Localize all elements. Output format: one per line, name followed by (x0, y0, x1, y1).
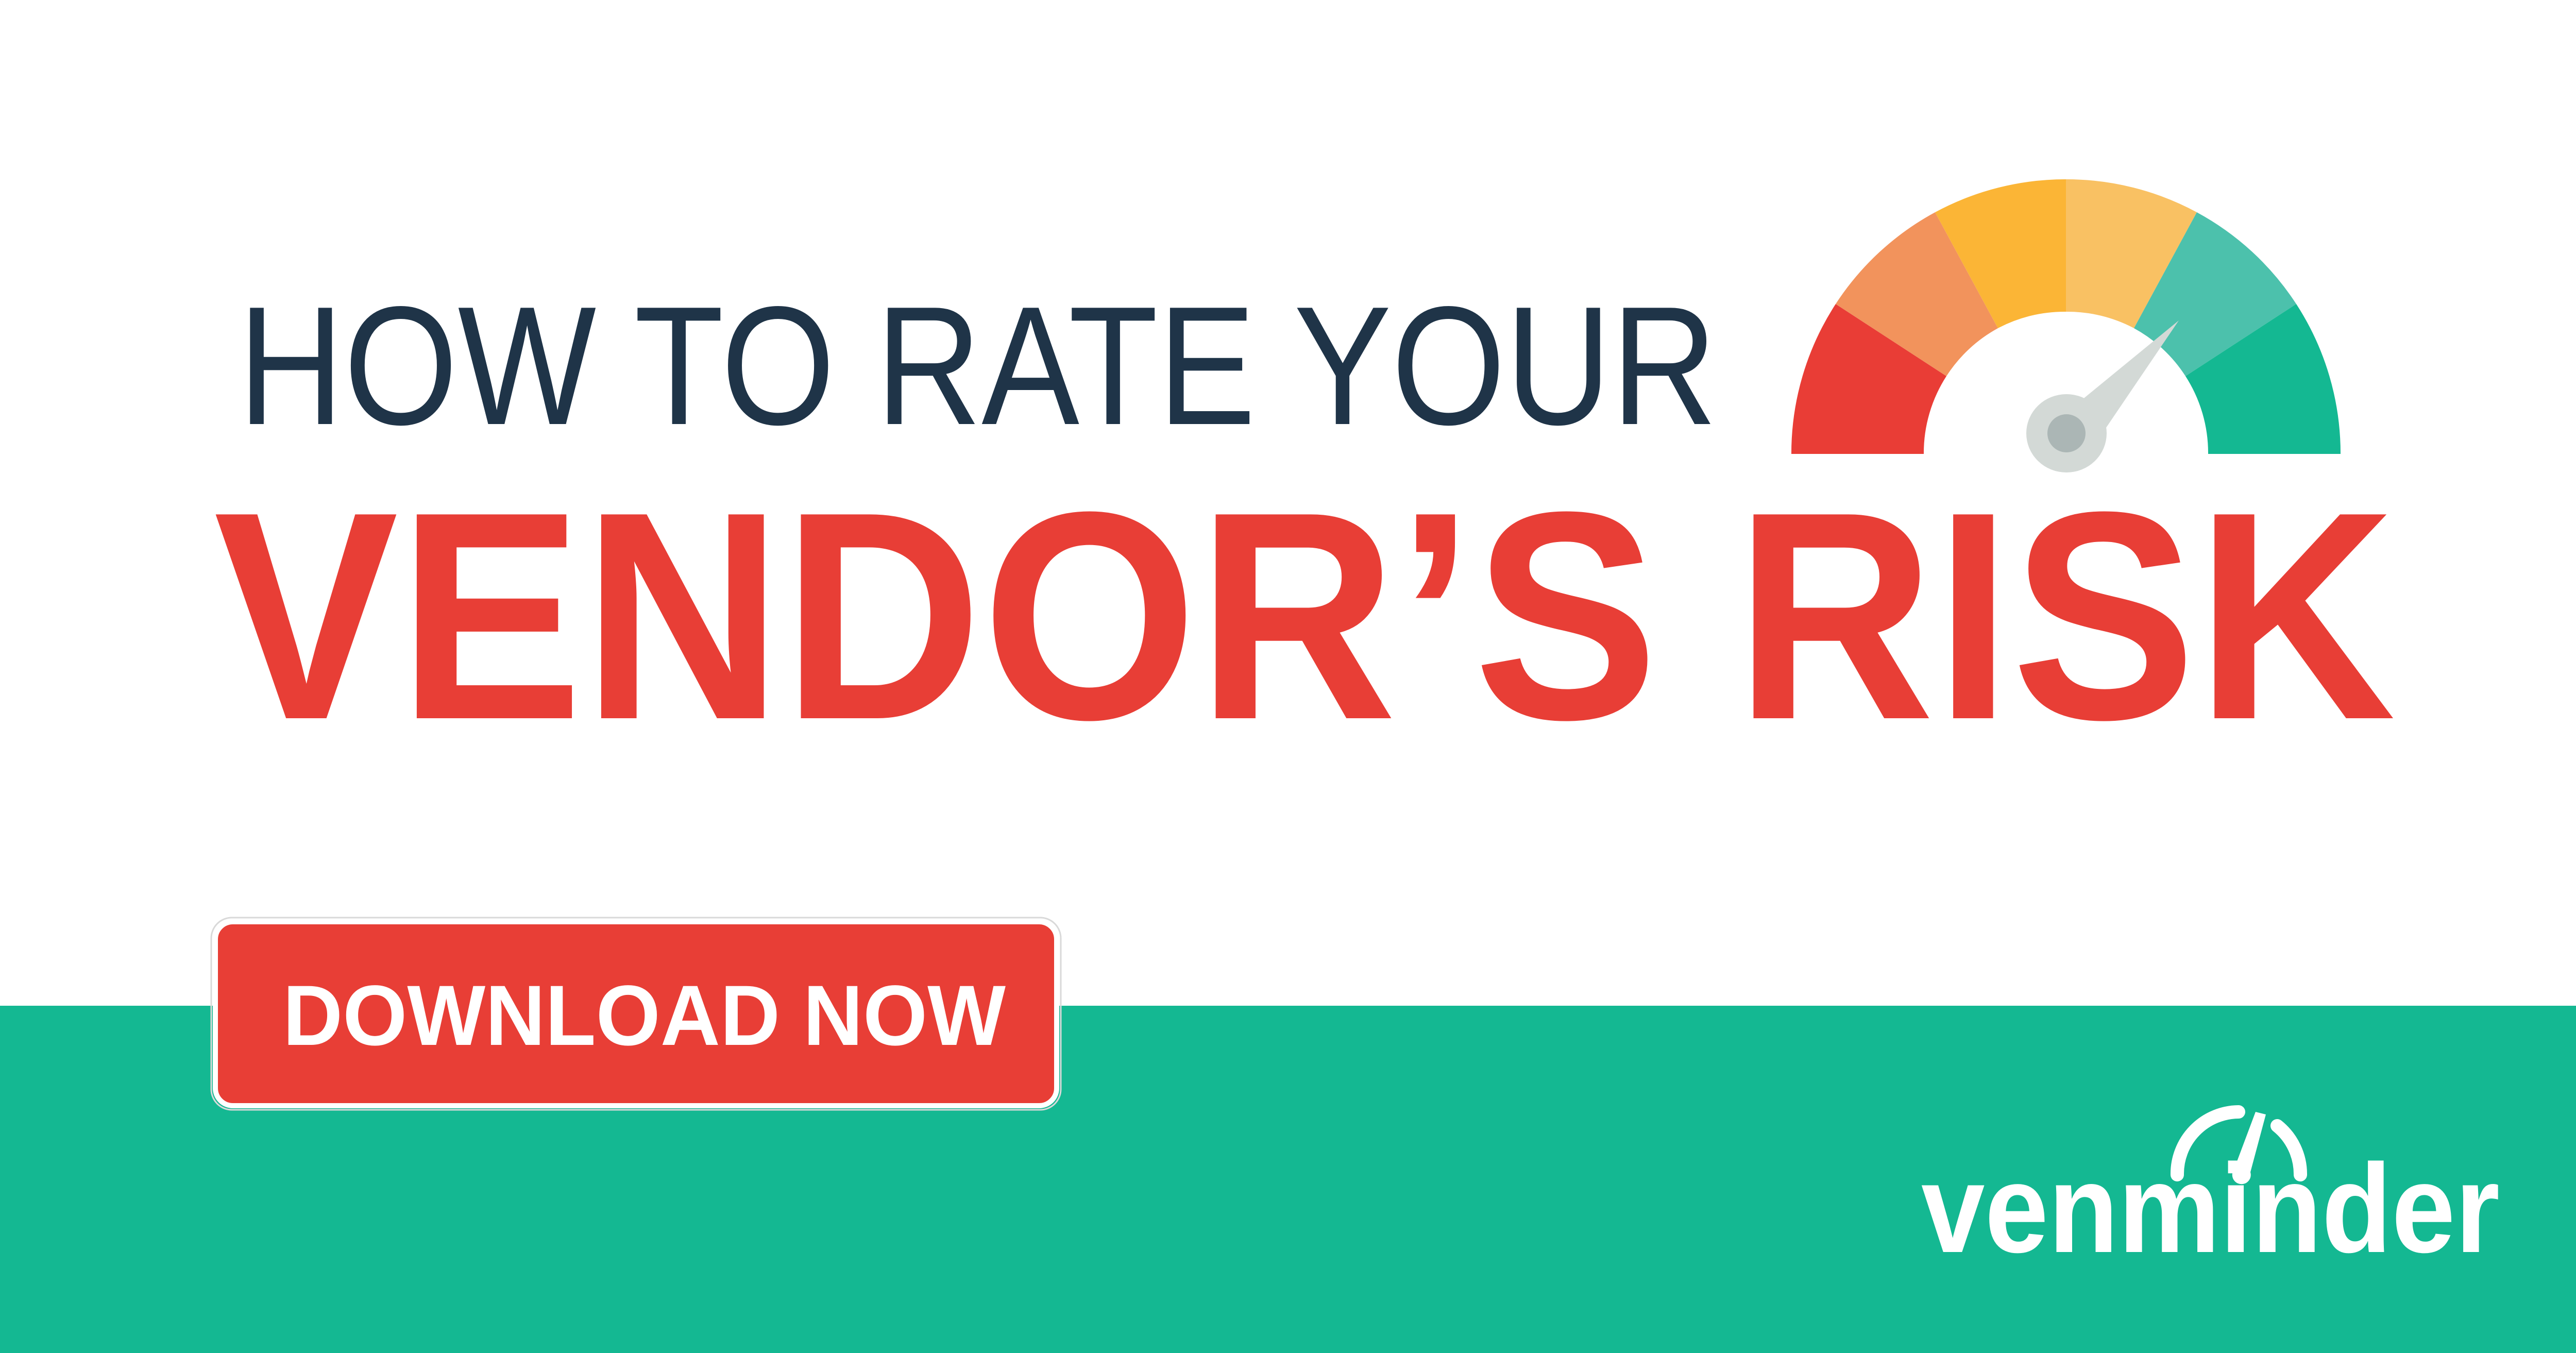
button: download now (211, 918, 1061, 1110)
needle (2076, 320, 2179, 428)
title: VENDOR'S RISK: VENDOR’S RISK (214, 450, 2396, 781)
button: download now: DOWNLOAD NOW (283, 968, 1006, 1063)
icon: logo gauge (2177, 1112, 2300, 1175)
icon: risk gauge (1791, 179, 2341, 472)
title: HOW TO RATE YOUR: HOW TO RATE YOUR (238, 271, 1717, 460)
green footer band (0, 1006, 2576, 1353)
logo: venminder: venminder (1921, 1138, 2500, 1279)
